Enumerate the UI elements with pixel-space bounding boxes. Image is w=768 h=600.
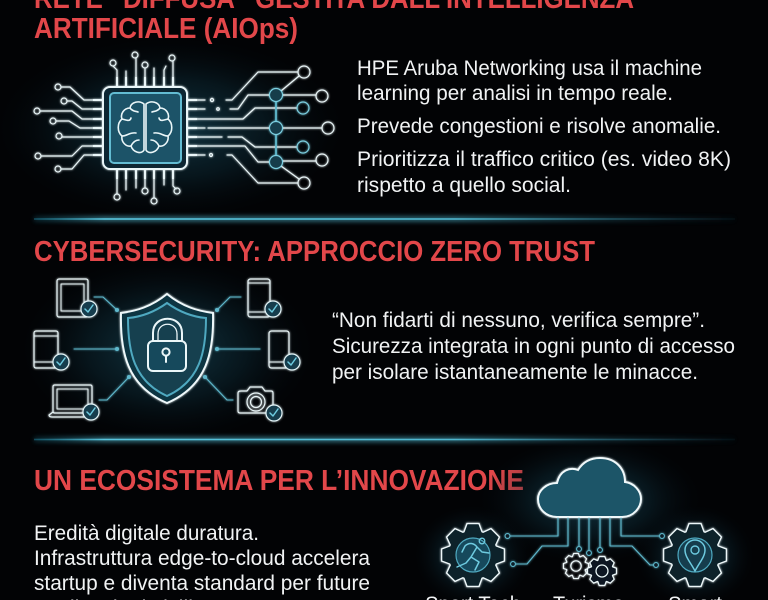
text block: machine learning: Prevede congestioni e risolve anomalie. [357,114,721,138]
text block: zero trust: per isolare istantaneamente le minacce. [332,360,698,384]
text block: machine learning: learning per analisi in tempo reale. [357,81,673,105]
shield [121,294,213,403]
device: phone top right [248,279,281,317]
chip body [103,87,187,169]
cloud traces [505,518,664,567]
title: rete diffusa AIOps: ARTIFICIALE (AIOps) [34,13,298,45]
text block: eredità digitale: Eredità digitale duratura. [34,521,259,545]
left circuit traces [34,84,93,172]
connectors to shield [74,297,260,400]
icon: small gears [563,553,616,585]
text block: machine learning [357,56,731,197]
brain icon [118,102,172,153]
chip pins [93,77,197,179]
gear labels [425,592,722,600]
text block: eredità digitale: startup e diventa standard per future [34,571,370,595]
padlock [148,319,186,371]
device: phone middle right [269,331,300,370]
icon: shield with padlock and connected devices [22,257,312,441]
device: laptop [49,385,99,420]
diagram: cloud connected to three gears [415,438,753,600]
text block: machine learning: HPE Aruba Networking usa il machine [357,56,702,80]
right neural network traces [197,66,334,189]
text block: eredità digitale [34,521,370,600]
heading: cybersecurity: CYBERSECURITY: APPROCCIO ZERO TRUST [34,236,595,268]
icon: AI chip with brain and circuit network [0,38,342,218]
text block: machine learning: rispetto a quello social. [357,173,571,197]
top and bottom circuit traces [110,52,180,204]
icon: cloud [538,458,641,517]
text block: eredità digitale: Infrastruttura edge-to-cloud accelera [34,546,370,570]
device: camera [238,387,282,421]
heading: ecosistema: UN ECOSISTEMA PER L’INNOVAZIONE [34,465,524,497]
title: rete diffusa AIOps [34,0,634,45]
device: tablet middle left [34,331,69,370]
text block: zero trust: Sicurezza integrata in ogni punto di accesso [332,334,735,358]
text block: zero trust [332,308,735,384]
device: tablet top left [57,279,97,317]
icon: gear with runner [442,524,504,586]
text block: machine learning: Prioritizza il traffico critico (es. video 8K) [357,147,731,171]
text block: zero trust: “Non fidarti di nessuno, verifica sempre”. [332,308,705,332]
icon: gear with map pin [664,524,726,586]
